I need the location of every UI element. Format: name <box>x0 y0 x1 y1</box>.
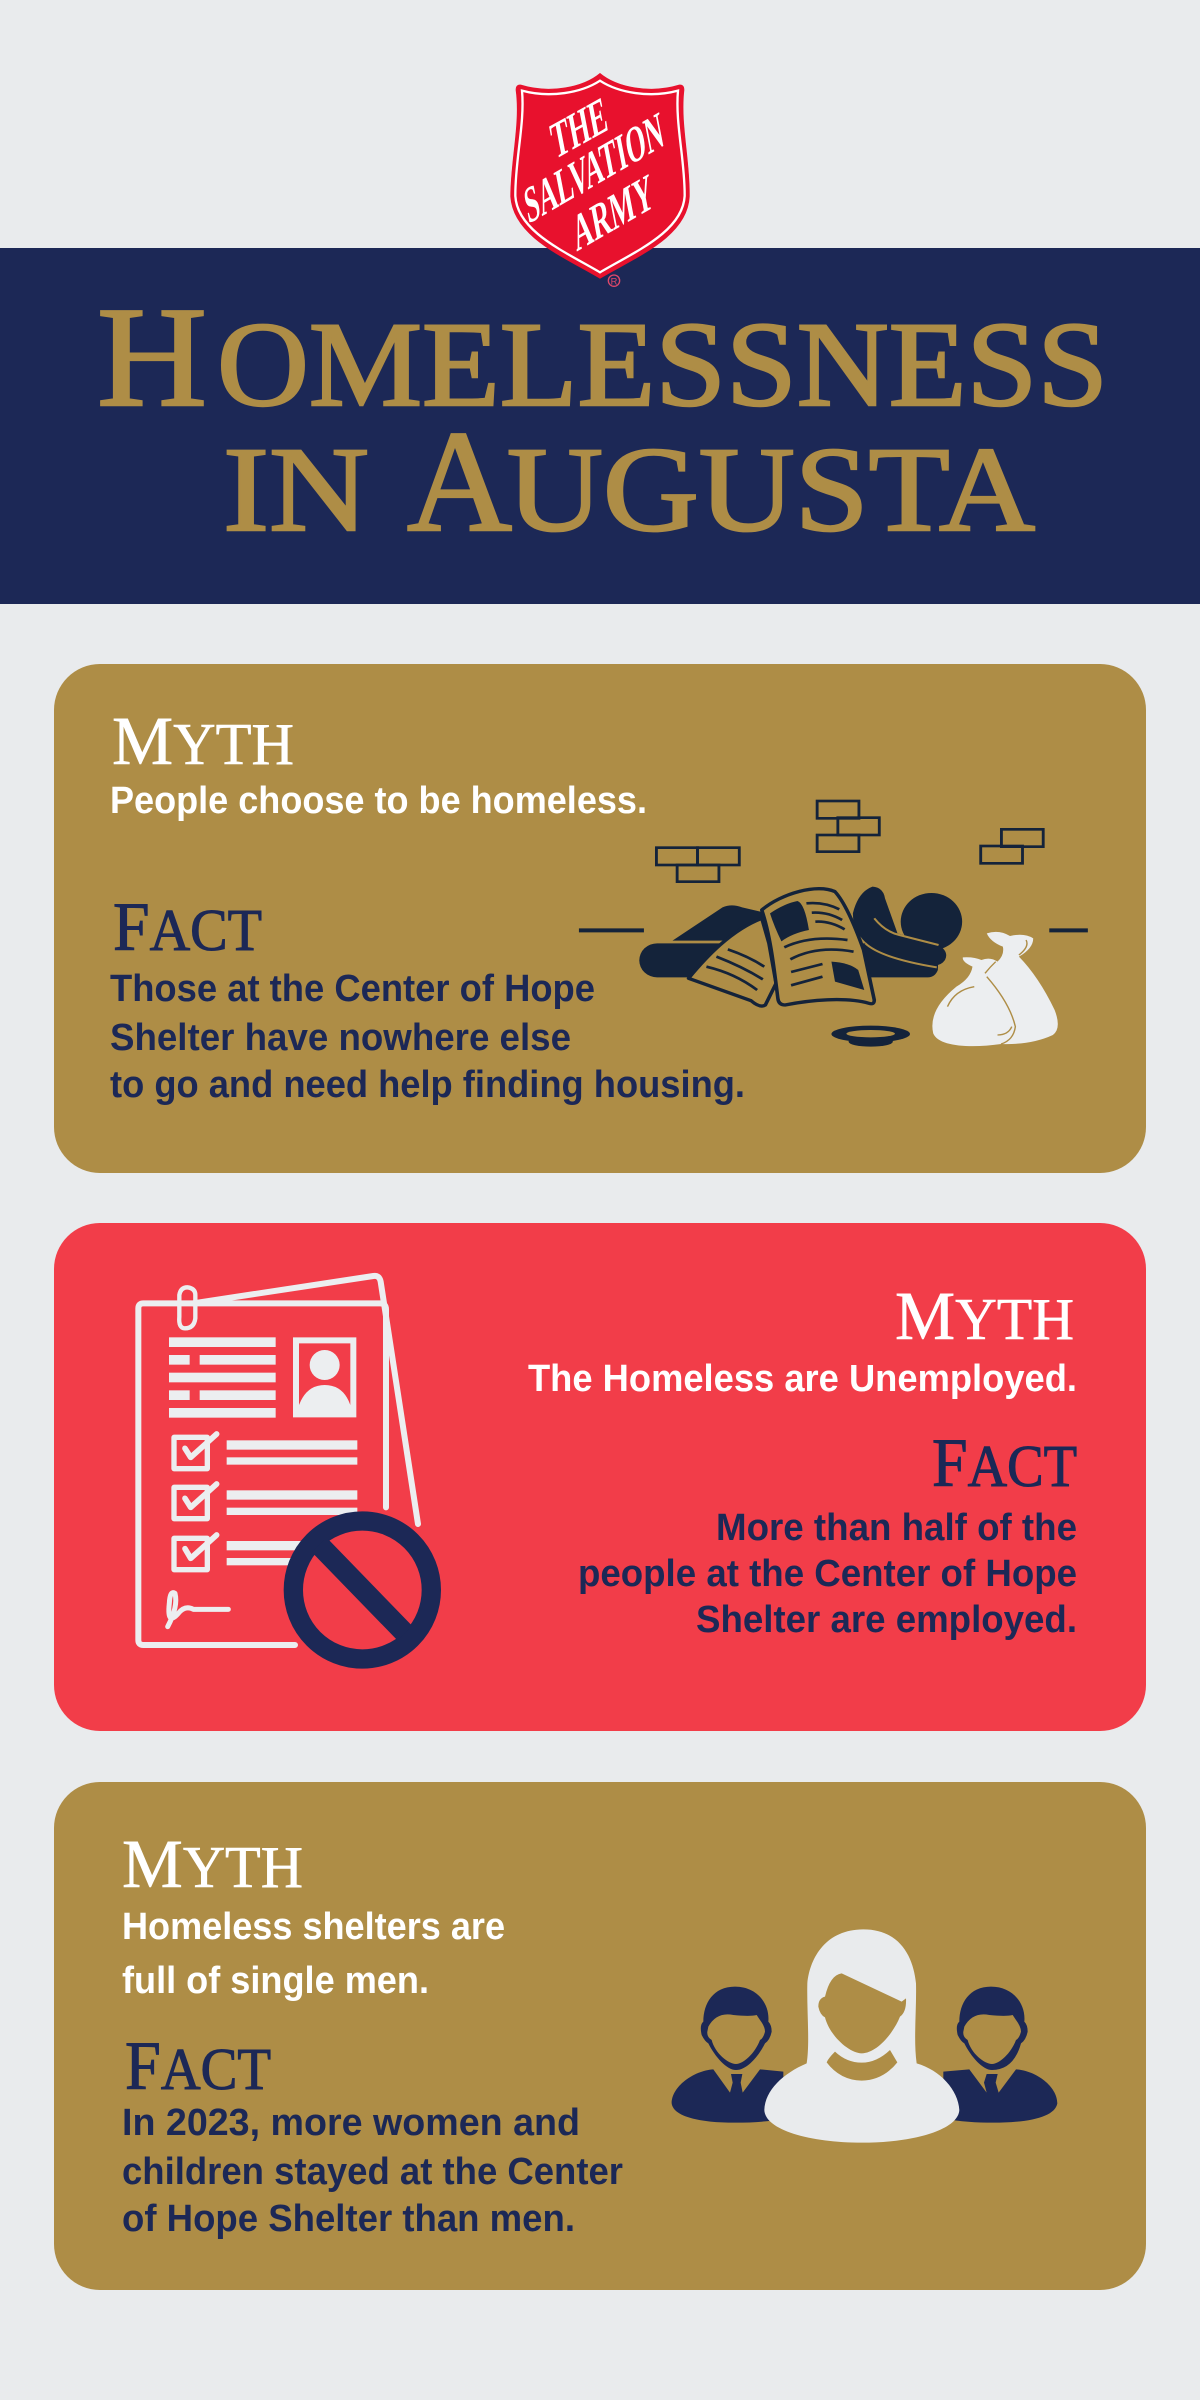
text: fact statement <box>110 968 745 1106</box>
banner <box>0 248 1200 604</box>
logo: Salvation Army shield: SALVATION <box>520 101 668 235</box>
text: fact statement: people at the Center of Hope <box>578 1553 1077 1595</box>
heading: myth: MYTH <box>112 703 294 779</box>
panel: myth 1 <box>54 664 1146 1173</box>
text: fact statement <box>122 2102 623 2240</box>
title: H <box>97 278 207 436</box>
heading: fact: FACT <box>113 889 262 965</box>
logo: Salvation Army shield: THE <box>546 85 611 170</box>
panel: myth 2 <box>54 1223 1146 1731</box>
text: myth statement: full of single men. <box>122 1960 429 2002</box>
panel: myth 3 <box>54 1782 1146 2290</box>
logo: Salvation Army shield: ARMY <box>568 162 657 262</box>
text: myth statement: The Homeless are Unemployed. <box>528 1358 1077 1400</box>
heading: myth: MYTH <box>895 1278 1074 1354</box>
icon: woman between two men <box>672 1929 1057 2143</box>
icon: person sleeping under newspapers <box>579 801 1088 1047</box>
icon: resume with prohibited sign <box>138 1276 431 1659</box>
text: fact statement: In 2023, more women and <box>122 2102 580 2144</box>
heading: fact: FACT <box>932 1425 1077 1501</box>
title: UGUSTA <box>507 423 1035 557</box>
text: fact statement: of Hope Shelter than men. <box>122 2198 575 2240</box>
text: fact statement: Shelter are employed. <box>696 1599 1077 1641</box>
text: fact statement: children stayed at the Center <box>122 2151 623 2193</box>
text: fact statement: to go and need help finding housing. <box>110 1064 745 1106</box>
text: myth statement <box>122 1906 505 2002</box>
text: fact statement: Shelter have nowhere else <box>110 1017 571 1059</box>
title: OMELESSNESS <box>217 298 1108 432</box>
text: myth statement: People choose to be homeless. <box>110 780 647 822</box>
logo: Salvation Army shield: R <box>611 276 618 286</box>
text: fact statement: Those at the Center of Hope <box>110 968 595 1010</box>
text: myth statement: Homeless shelters are <box>122 1906 505 1948</box>
text: fact statement <box>578 1507 1077 1641</box>
title: A <box>407 402 512 562</box>
logo: Salvation Army shield <box>511 73 689 286</box>
title: IN <box>223 423 369 557</box>
heading: fact: FACT <box>125 2028 271 2104</box>
text: fact statement: More than half of the <box>716 1507 1077 1549</box>
title <box>97 278 1108 562</box>
heading: myth: MYTH <box>122 1826 303 1902</box>
